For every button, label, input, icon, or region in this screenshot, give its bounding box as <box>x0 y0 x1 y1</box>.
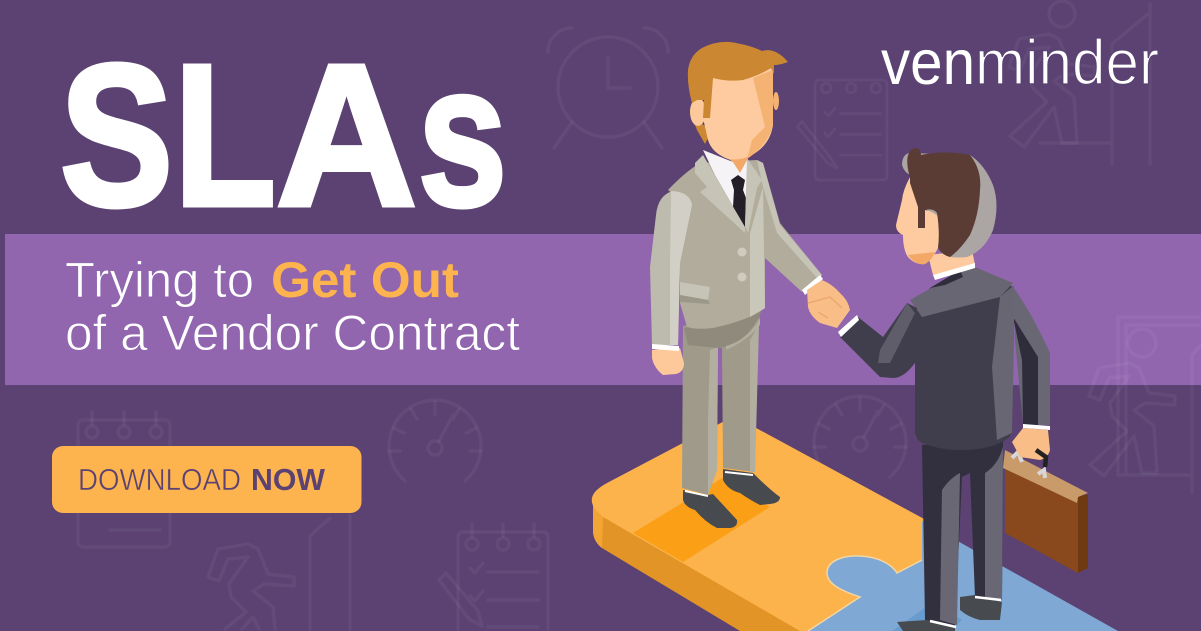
man 2 briefcase <box>1003 450 1088 573</box>
subtitle: Get Out <box>271 252 459 308</box>
logo: venminder: ven <box>881 28 975 98</box>
purple band <box>5 234 1201 385</box>
handshake <box>807 280 850 328</box>
puzzle: yellow piece <box>592 416 926 631</box>
man 1 shoes <box>683 469 780 528</box>
man 1: business man in grey suit <box>650 42 823 528</box>
man 1 tie <box>731 175 746 228</box>
man 1 cuff right <box>802 275 823 295</box>
background icon: person at door top right <box>1009 1 1150 164</box>
man 2 right arm <box>1013 287 1050 425</box>
man 1 left sleeve <box>650 191 692 345</box>
button: download now: NOW <box>251 462 326 497</box>
title: L <box>174 22 276 248</box>
man 1 left hand <box>652 348 684 375</box>
man 1 head <box>688 42 788 160</box>
man 1 lapels <box>695 155 745 233</box>
man 1 torso <box>668 160 765 329</box>
background icon: checklist top <box>797 80 887 180</box>
subtitle: Trying to <box>65 252 254 308</box>
title: A <box>276 22 417 248</box>
man 2 shoes <box>897 595 1002 631</box>
title <box>60 22 507 248</box>
man 1 shirt and neck <box>703 150 748 227</box>
background icon: person at door right <box>1089 317 1201 493</box>
title: S <box>60 22 173 248</box>
man 2 left arm <box>840 303 917 378</box>
button: download now: DOWNLOAD <box>78 462 241 497</box>
button: download now <box>52 446 362 513</box>
background icon: person at door bottom <box>208 516 350 629</box>
background icon: alarm clock <box>548 28 668 148</box>
man 1 legs <box>682 308 762 495</box>
title: s <box>418 22 507 248</box>
background icon: gauge right <box>814 396 906 477</box>
man 2 head <box>896 148 996 264</box>
man 2 hand on briefcase <box>1012 428 1050 460</box>
man 2 legs <box>922 440 1003 627</box>
man 2 neck and collar <box>928 250 975 275</box>
subtitle: of a Vendor Contract <box>65 305 520 361</box>
background icon: checklist bottom <box>439 524 548 629</box>
subtitle <box>65 252 520 361</box>
man 2 torso <box>915 268 1013 450</box>
background icon: gauge left <box>389 400 481 481</box>
background icon: checklist left <box>78 412 170 547</box>
puzzle: blue piece <box>808 521 1118 631</box>
man 1 arm right <box>740 160 822 292</box>
man 2: business man in dark suit, seen from behind <box>838 148 1088 631</box>
logo: venminder <box>881 28 1159 98</box>
logo: venminder: minder <box>975 28 1159 98</box>
